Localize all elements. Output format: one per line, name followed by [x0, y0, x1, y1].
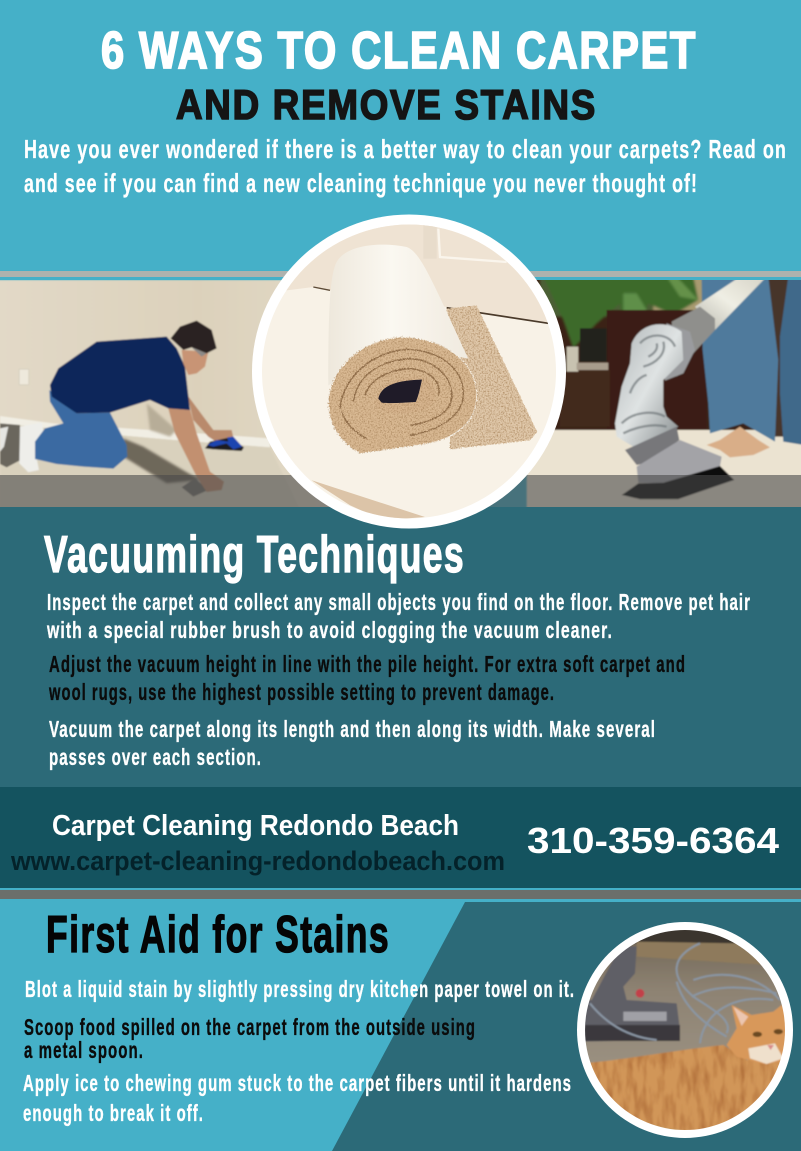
head — [182, 350, 208, 375]
wall — [286, 224, 548, 322]
carpet — [527, 430, 801, 510]
vacuum — [583, 947, 680, 1042]
company name: Carpet Cleaning Redondo Beach — [52, 810, 459, 842]
cat head — [727, 1005, 790, 1064]
text block: first aid tip 2: Scoop food spilled on the carpet from the outside using — [24, 1014, 476, 1040]
photo circle: cat and vacuum — [577, 922, 797, 1143]
shirt — [50, 337, 190, 413]
tools — [205, 437, 244, 451]
cords — [590, 943, 780, 1043]
stripe under header — [0, 271, 801, 280]
boots — [0, 423, 21, 467]
plant — [540, 277, 703, 348]
panel: first aid background — [0, 899, 801, 1151]
roll end — [328, 337, 477, 454]
flat carpet — [447, 305, 537, 449]
cat body — [590, 1045, 790, 1133]
white tube — [695, 277, 767, 330]
text block: first aid tip 3 — [23, 1070, 572, 1126]
contact band — [0, 787, 801, 888]
jeans — [769, 280, 788, 438]
text block: vacuuming tip 3 — [49, 716, 656, 770]
heading: vacuuming techniques: Vacuuming Techniques — [44, 526, 465, 584]
brush — [622, 466, 734, 499]
text block: vacuuming tip 3: passes over each section. — [49, 744, 262, 770]
stripe under contact band — [0, 888, 801, 899]
nozzle collar — [625, 427, 679, 465]
text block: vacuuming tip 1 — [46, 589, 751, 643]
translucent carpet overlay band — [0, 475, 801, 507]
text block: first aid tip 2: a metal spoon. — [24, 1037, 144, 1063]
photo circle: rolled carpet — [250, 212, 570, 532]
text block: first aid tip 3: enough to break it off. — [23, 1100, 204, 1126]
roll hollow — [378, 380, 422, 403]
roll body — [328, 245, 468, 385]
photo strip — [0, 277, 801, 510]
jeans — [35, 390, 127, 469]
bottom-left carpet strip — [312, 480, 425, 520]
photo: man fitting carpet — [0, 280, 330, 507]
far arm — [187, 395, 234, 445]
photo: vacuum nozzle — [527, 277, 801, 510]
text block: first aid tip 2 — [24, 1014, 476, 1063]
panel: vacuuming techniques background — [0, 507, 801, 787]
nozzle body — [637, 440, 722, 483]
text block: vacuuming tip 2 — [48, 651, 686, 705]
clear elbow — [615, 324, 683, 447]
heading: first aid for stains: First Aid for Stains — [46, 906, 390, 964]
near arm — [168, 408, 224, 492]
panel: header background — [0, 0, 801, 271]
phone number: 310-359-6364 — [527, 820, 779, 861]
subtitle: AND REMOVE STAINS — [176, 81, 597, 128]
website: www.carpet-cleaning-redondobeach.com — [10, 846, 505, 876]
intro text — [24, 134, 787, 198]
